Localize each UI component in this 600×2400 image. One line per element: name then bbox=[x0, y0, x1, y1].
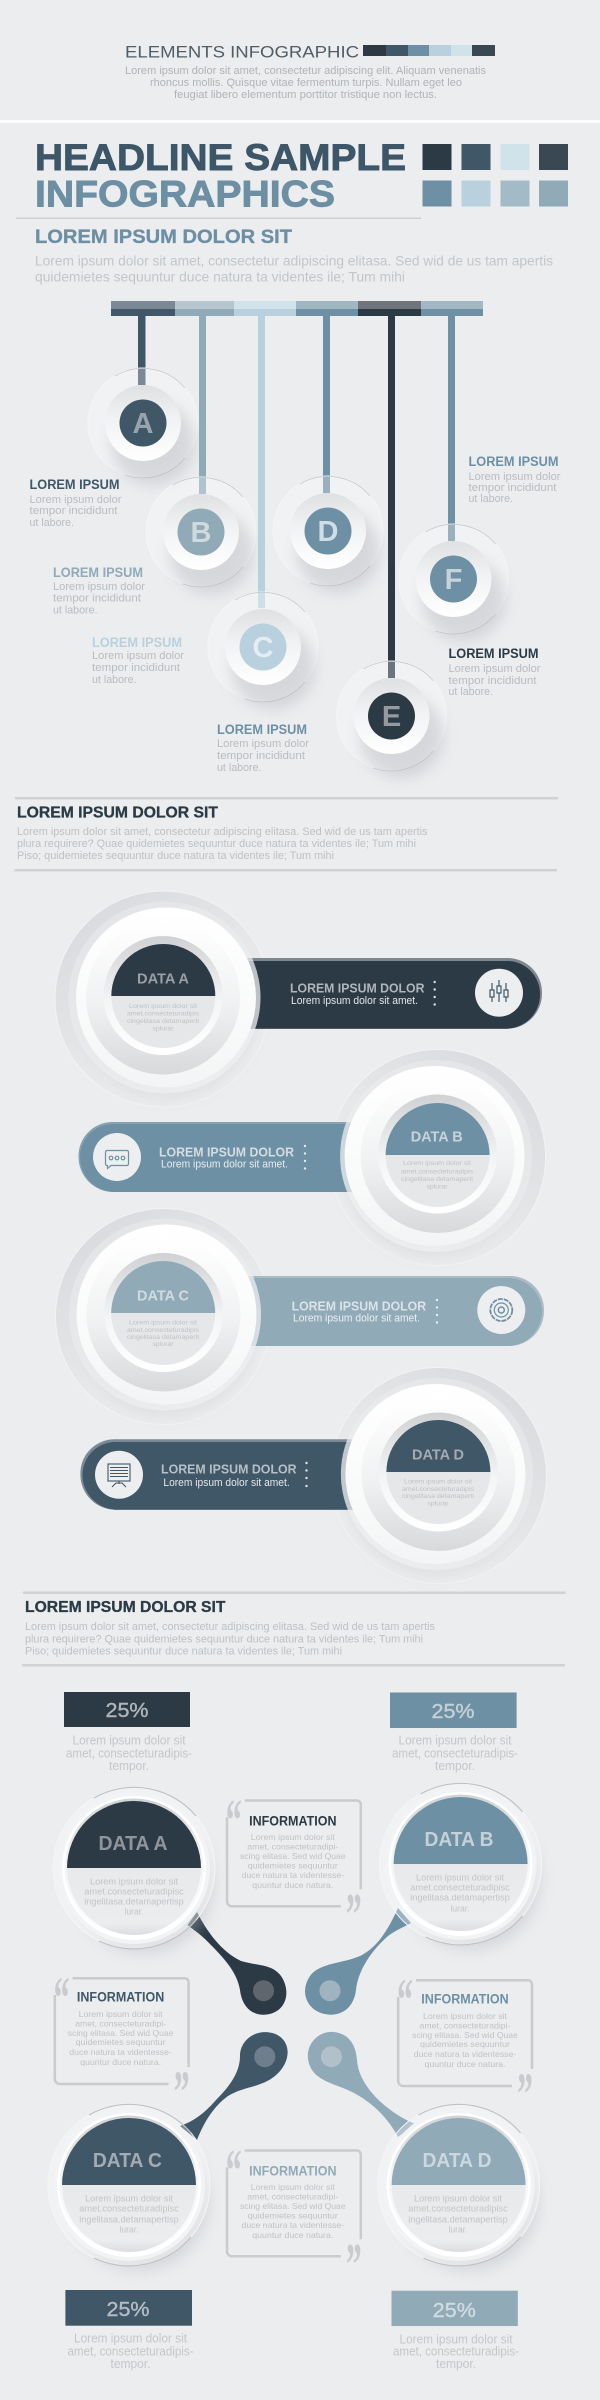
percent box A bbox=[64, 1692, 190, 1727]
connector D bbox=[308, 2032, 415, 2137]
percent caption B: amet, consecteturadipis- bbox=[392, 1746, 518, 1760]
information box right: Lorem ipsum dolor sit bbox=[423, 2011, 508, 2021]
information box bottom centre: quidemietes sequuntur bbox=[248, 2210, 338, 2220]
information box top centre: “ bbox=[226, 1787, 242, 1853]
disc D: Lorem ipsum dolor sit bbox=[404, 1479, 472, 1486]
percent caption B: tempor. bbox=[435, 1758, 475, 1773]
disc C bbox=[69, 1218, 261, 1410]
label D: LOREM IPSUM bbox=[217, 722, 307, 737]
bar A text: Lorem ipsum dolor sit amet. bbox=[291, 995, 418, 1007]
pendant A bbox=[88, 368, 198, 485]
disc A: Lorem ipsum dolor sit bbox=[129, 1003, 197, 1010]
data circle D: lurar. bbox=[448, 2224, 468, 2236]
label F: ut labore. bbox=[468, 493, 513, 505]
label A: LOREM IPSUM bbox=[30, 477, 120, 492]
data circle C: lurar. bbox=[120, 2224, 138, 2236]
information box bottom centre: scing elitasa. Sed wid Quae bbox=[240, 2201, 346, 2211]
icon: presentation board bbox=[95, 1451, 143, 1499]
percent caption D: tempor. bbox=[436, 2356, 476, 2371]
data circle C: ingelitasa.detamapertisp bbox=[79, 2214, 179, 2226]
percent box B: 25% bbox=[432, 1701, 475, 1723]
label D bbox=[217, 722, 309, 774]
section two intro bbox=[17, 826, 428, 862]
data circle B: amet.consecteturadipisc bbox=[410, 1882, 510, 1894]
label D: Lorem ipsum dolor bbox=[217, 738, 309, 750]
data circle C bbox=[48, 2104, 210, 2271]
label C: LOREM IPSUM bbox=[92, 635, 182, 650]
information box right: quuntur duce natura. bbox=[424, 2059, 506, 2069]
percent box C bbox=[65, 2290, 192, 2326]
pendant D bbox=[273, 476, 383, 593]
information box top centre: ” bbox=[346, 1881, 362, 1947]
disc B: cingelitasa detamaperti bbox=[401, 1176, 473, 1183]
label E: tempor incididunt bbox=[448, 675, 536, 687]
bar B text bbox=[159, 1144, 295, 1171]
bar C text: Lorem ipsum dolor sit amet. bbox=[293, 1313, 420, 1325]
headline block bbox=[35, 136, 406, 214]
disc D: splurar bbox=[428, 1501, 449, 1508]
percent caption B bbox=[392, 1732, 518, 1773]
data circle D: Lorem ipsum dolor sit bbox=[414, 2194, 502, 2204]
data circle B: DATA B bbox=[424, 1829, 494, 1851]
header block bbox=[125, 42, 495, 101]
information box left: quuntur duce natura. bbox=[80, 2057, 161, 2067]
pendant F bbox=[398, 524, 508, 641]
hanging stems bbox=[138, 316, 455, 678]
label A: tempor incididunt bbox=[30, 505, 118, 517]
information box left: Lorem ipsum dolor sit bbox=[79, 2009, 163, 2019]
label E: LOREM IPSUM bbox=[448, 646, 538, 661]
disc B: DATA B bbox=[411, 1128, 463, 1146]
information box top centre: INFORMATION bbox=[249, 1814, 337, 1829]
information box bottom centre: ” bbox=[346, 2231, 362, 2297]
hanging bar bbox=[111, 301, 483, 316]
information box bottom centre: Lorem ipsum dolor sit bbox=[251, 2182, 335, 2192]
percent box D: 25% bbox=[433, 2300, 476, 2322]
data row C bbox=[56, 1208, 544, 1424]
information box left bbox=[54, 1965, 190, 2125]
bar A text: LOREM IPSUM DOLOR bbox=[290, 980, 425, 996]
disc C: splurar bbox=[152, 1341, 174, 1348]
disc D halo bbox=[330, 1368, 546, 1584]
information box bottom centre: quuntur duce natura. bbox=[252, 2230, 333, 2240]
percent caption C bbox=[68, 2330, 194, 2371]
headline line one: HEADLINE SAMPLE bbox=[35, 136, 406, 178]
disc C halo bbox=[56, 1208, 272, 1424]
disc B: amet.consecteturadipis bbox=[401, 1169, 474, 1176]
information box right: scing elitasa. Sed wid Quae bbox=[412, 2030, 518, 2040]
section three heading: LOREM IPSUM DOLOR SIT bbox=[25, 1599, 226, 1616]
information box bottom centre: “ bbox=[226, 2137, 242, 2203]
percent caption B: Lorem ipsum dolor sit bbox=[398, 1732, 512, 1748]
disc A halo bbox=[55, 891, 271, 1107]
bar B text: LOREM IPSUM DOLOR bbox=[159, 1144, 295, 1160]
label B bbox=[53, 565, 145, 616]
percent caption C: Lorem ipsum dolor sit bbox=[74, 2330, 187, 2346]
section two intro: Piso; quidemietes sequuntur duce natura ta videntes ile; Tum mihi bbox=[17, 850, 334, 862]
bar A text bbox=[290, 980, 425, 1007]
information box right: quidemietes sequuntur bbox=[420, 2039, 510, 2049]
disc D: cingelitasa detamaperti bbox=[402, 1493, 474, 1500]
label D: tempor incididunt bbox=[217, 750, 305, 762]
label F: tempor incididunt bbox=[468, 482, 556, 494]
header intro text: rhoncus mollis. Quisque vitae fermentum turpis. Nullam eget leo bbox=[150, 77, 462, 89]
percent caption D: Lorem ipsum dolor sit bbox=[400, 2332, 513, 2346]
disc D: DATA D bbox=[412, 1446, 464, 1464]
label D: ut labore. bbox=[217, 762, 262, 774]
data circle A: DATA A bbox=[98, 1833, 168, 1855]
label C: Lorem ipsum dolor bbox=[92, 650, 184, 662]
section two heading: LOREM IPSUM DOLOR SIT bbox=[17, 804, 219, 822]
data circle B: ingelitasa.detamapertisp bbox=[410, 1892, 510, 1904]
label F: Lorem ipsum dolor bbox=[468, 471, 561, 483]
information box left: scing elitasa. Sed wid Quae bbox=[68, 2028, 174, 2038]
data circle A: Lorem ipsum dolor sit bbox=[90, 1876, 178, 1888]
data circle C: Lorem ipsum dolor sit bbox=[85, 2194, 173, 2204]
information box left: duce natura ta videntesse- bbox=[69, 2047, 172, 2057]
header intro text bbox=[125, 65, 486, 101]
bar D bbox=[80, 1439, 385, 1510]
pendant D: D bbox=[318, 516, 338, 548]
data circle D bbox=[378, 2104, 540, 2271]
disc C: DATA C bbox=[137, 1288, 189, 1304]
pendant E bbox=[336, 661, 446, 778]
label A: ut labore. bbox=[30, 517, 74, 529]
connector A bbox=[188, 1912, 286, 2015]
dots A bbox=[434, 981, 436, 1006]
data row D bbox=[80, 1368, 546, 1584]
section three intro bbox=[25, 1621, 435, 1658]
information box left: amet, consecteturadipi- bbox=[75, 2018, 166, 2028]
information box right: “ bbox=[397, 1967, 413, 2033]
data circle A bbox=[53, 1787, 215, 1954]
bar C text bbox=[292, 1298, 427, 1325]
disc D bbox=[341, 1378, 533, 1570]
label A bbox=[30, 477, 122, 529]
icon: chat bubble bbox=[93, 1133, 141, 1181]
disc C: Lorem ipsum dolor sit bbox=[129, 1320, 197, 1327]
disc A: amet.consecteturadipis bbox=[127, 1010, 200, 1018]
disc A: cingelitasa detamaperti bbox=[127, 1018, 199, 1025]
dots D bbox=[305, 1462, 308, 1487]
label B: ut labore. bbox=[53, 604, 98, 616]
section one intro: Lorem ipsum dolor sit amet, consectetur adipiscing elitasa. Sed wid de us tam apertis bbox=[35, 252, 553, 268]
disc B: Lorem ipsum dolor sit bbox=[403, 1160, 471, 1167]
connector C bbox=[180, 2032, 288, 2140]
disc A: DATA A bbox=[137, 970, 189, 988]
information box top centre: quuntur duce natura. bbox=[252, 1880, 333, 1890]
section one heading: LOREM IPSUM DOLOR SIT bbox=[35, 226, 292, 248]
information box top centre: Lorem ipsum dolor sit bbox=[251, 1832, 335, 1842]
percent box B bbox=[390, 1692, 517, 1728]
bar C text: LOREM IPSUM DOLOR bbox=[292, 1298, 427, 1314]
headline line two: INFOGRAPHICS bbox=[35, 172, 335, 214]
percent caption A bbox=[66, 1732, 192, 1773]
information box bottom centre: duce natura ta videntesse- bbox=[242, 2220, 344, 2230]
label E: Lorem ipsum dolor bbox=[448, 663, 541, 675]
information box left: ” bbox=[174, 2059, 190, 2125]
pendant F: F bbox=[445, 564, 462, 596]
data row B bbox=[78, 1050, 546, 1266]
label E bbox=[448, 646, 541, 698]
data circle D: amet.consecteturadipisc bbox=[408, 2204, 508, 2214]
information box bottom centre: INFORMATION bbox=[249, 2164, 337, 2179]
section three intro: Lorem ipsum dolor sit amet, consectetur adipiscing elitasa. Sed wid de us tam apertis bbox=[25, 1621, 435, 1633]
data circle B bbox=[380, 1783, 542, 1950]
information box left: “ bbox=[54, 1965, 70, 2031]
pendant A: A bbox=[133, 408, 154, 440]
information box right: ” bbox=[517, 2061, 533, 2127]
data circle A: lurar. bbox=[124, 1906, 144, 1918]
bar A bbox=[215, 958, 542, 1029]
header intro text: feugiat libero elementum porttitor tristique non lectus. bbox=[174, 89, 437, 101]
percent caption C: tempor. bbox=[110, 2356, 150, 2371]
information box right: amet, consecteturadipi- bbox=[420, 2020, 511, 2030]
data circle B: lurar. bbox=[450, 1904, 470, 1914]
section one intro: quidemietes sequuntur duce natura ta videntes ile; Tum mihi bbox=[35, 268, 405, 284]
label E: ut labore. bbox=[448, 686, 493, 698]
pendant B bbox=[146, 477, 256, 594]
disc B halo bbox=[330, 1050, 546, 1266]
information box right: duce natura ta videntesse- bbox=[414, 2049, 516, 2059]
information box right bbox=[397, 1967, 533, 2127]
label A: Lorem ipsum dolor bbox=[30, 494, 122, 506]
information box left: quidemietes sequuntur bbox=[76, 2037, 166, 2047]
section three intro: Piso; quidemietes sequuntur duce natura ta videntes ile; Tum mihi bbox=[25, 1646, 342, 1658]
percent caption A: amet, consecteturadipis- bbox=[66, 1746, 192, 1760]
pendant E: E bbox=[382, 701, 401, 733]
header intro text: Lorem ipsum dolor sit amet, consectetur adipiscing elit. Aliquam venenatis bbox=[125, 65, 486, 77]
data circle A: ingelitasa.detamapertisp bbox=[84, 1896, 184, 1908]
data circle D: ingelitasa.detamapertisp bbox=[408, 2214, 508, 2226]
percent caption D: amet, consecteturadipis- bbox=[393, 2344, 519, 2358]
disc B: splurar bbox=[426, 1184, 448, 1191]
information box top centre: scing elitasa. Sed wid Quae bbox=[240, 1851, 346, 1861]
data circle A: amet.consecteturadipisc bbox=[84, 1886, 184, 1898]
information box left: INFORMATION bbox=[77, 1990, 164, 2004]
percent caption D bbox=[393, 2332, 519, 2371]
information box right: INFORMATION bbox=[421, 1992, 509, 2006]
information box top centre: duce natura ta videntesse- bbox=[242, 1870, 344, 1880]
data circle C: amet.consecteturadipisc bbox=[79, 2204, 179, 2214]
label C: ut labore. bbox=[92, 674, 136, 686]
percent caption C: amet, consecteturadipis- bbox=[68, 2344, 194, 2358]
colour swatches bbox=[422, 144, 568, 206]
pendant C bbox=[208, 592, 318, 709]
percent caption A: tempor. bbox=[109, 1758, 149, 1773]
bar B bbox=[78, 1122, 385, 1192]
section one intro bbox=[35, 252, 553, 284]
label C bbox=[92, 635, 184, 686]
data row A bbox=[55, 891, 542, 1107]
information box top centre: quidemietes sequuntur bbox=[248, 1860, 338, 1870]
disc C: cingelitasa detamaperti bbox=[127, 1334, 199, 1341]
section two intro: plura requirere? Quae quidemietes sequuntur duce natura ta videntes ile; Tum mihi bbox=[17, 838, 416, 850]
pendant C: C bbox=[253, 632, 274, 664]
icon: target bbox=[477, 1286, 525, 1334]
header colour strip bbox=[363, 45, 495, 56]
disc C: amet.consecteturadipis bbox=[127, 1327, 200, 1334]
label F: LOREM IPSUM bbox=[468, 454, 558, 469]
label B: Lorem ipsum dolor bbox=[53, 581, 145, 593]
percent box C: 25% bbox=[106, 2299, 150, 2321]
header title: ELEMENTS INFOGRAPHIC bbox=[125, 42, 359, 61]
disc B bbox=[340, 1060, 532, 1252]
information box bottom centre: amet, consecteturadipi- bbox=[247, 2191, 338, 2201]
label B: tempor incididunt bbox=[53, 592, 141, 604]
percent box A: 25% bbox=[106, 1700, 149, 1722]
disc A bbox=[68, 902, 260, 1094]
label C: tempor incididunt bbox=[92, 662, 180, 674]
data circle B: Lorem ipsum dolor sit bbox=[416, 1872, 504, 1884]
section three intro: plura requirere? Quae quidemietes sequuntur duce natura ta videntes ile; Tum mihi bbox=[25, 1634, 423, 1646]
dots C bbox=[436, 1299, 438, 1324]
bar C bbox=[215, 1276, 544, 1346]
disc A: splurar bbox=[152, 1026, 174, 1032]
data circle C: DATA C bbox=[93, 2150, 162, 2172]
pendant B: B bbox=[191, 517, 211, 549]
information box top centre: amet, consecteturadipi- bbox=[247, 1841, 338, 1851]
disc D: amet.consecteturadipis bbox=[402, 1486, 475, 1493]
bar D text: LOREM IPSUM DOLOR bbox=[161, 1462, 297, 1476]
label B: LOREM IPSUM bbox=[53, 565, 143, 580]
dots B bbox=[304, 1145, 306, 1170]
label F bbox=[468, 454, 561, 505]
section two intro: Lorem ipsum dolor sit amet, consectetur adipiscing elitasa. Sed wid de us tam apertis bbox=[17, 826, 428, 838]
information box top centre bbox=[226, 1787, 362, 1947]
icon: sliders bbox=[475, 969, 523, 1017]
percent box D bbox=[392, 2291, 518, 2326]
data circle D: DATA D bbox=[422, 2150, 492, 2172]
percent caption A: Lorem ipsum dolor sit bbox=[72, 1732, 186, 1748]
bar D text: Lorem ipsum dolor sit amet. bbox=[163, 1477, 290, 1489]
bar D text bbox=[161, 1462, 297, 1489]
bar B text: Lorem ipsum dolor sit amet. bbox=[161, 1159, 288, 1171]
connector B bbox=[305, 1908, 411, 2015]
information box bottom centre bbox=[226, 2137, 362, 2297]
